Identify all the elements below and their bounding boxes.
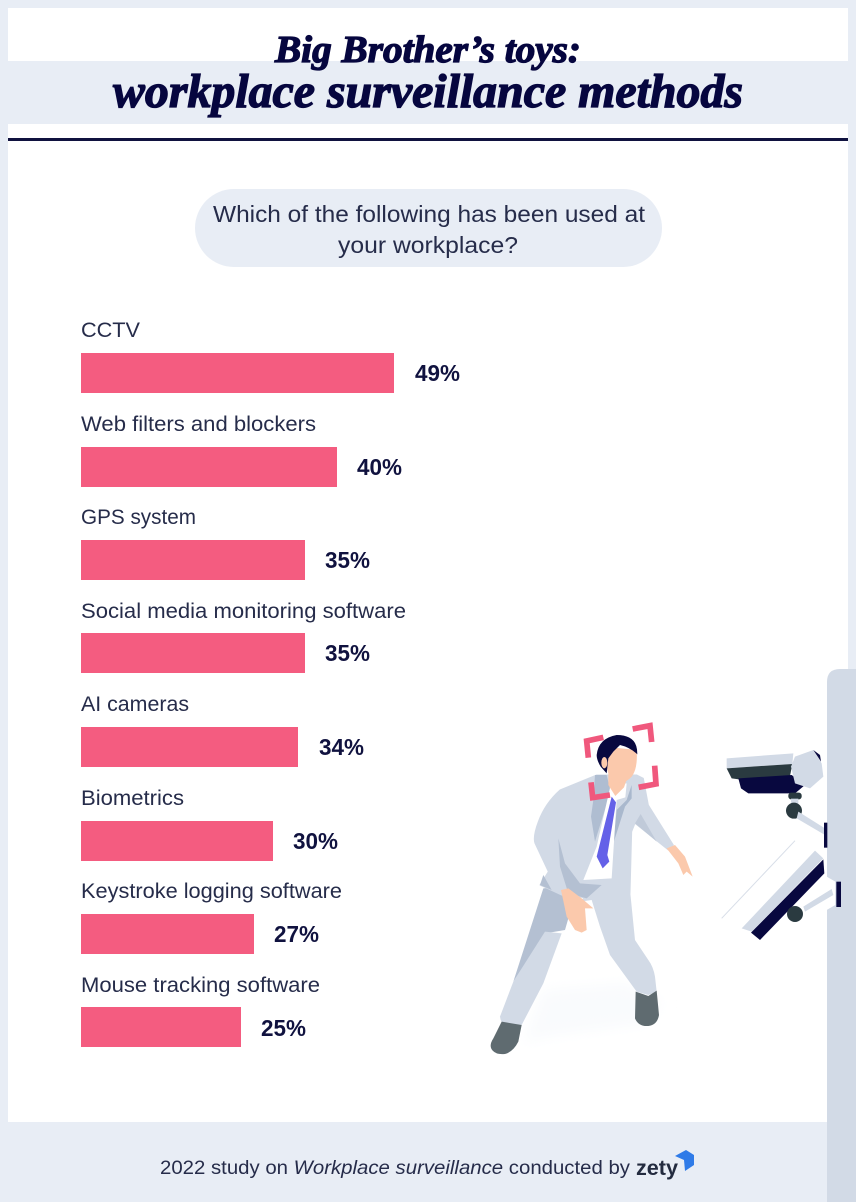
title: workplace surveillance methods (113, 65, 743, 118)
question pill: your workplace? (338, 232, 518, 258)
title band (8, 61, 848, 124)
bar: Keystroke logging software 27%: 27% (274, 921, 319, 947)
bar: Web filters and blockers 40%: Web filters and blockers (81, 413, 316, 436)
bar: CCTV 49% (81, 319, 460, 393)
bar: Keystroke logging software 27% (81, 880, 342, 954)
bar: Mouse tracking software 25%: Mouse tracking software (81, 974, 320, 997)
bar: CCTV 49%: 49% (415, 360, 460, 386)
neck (608, 770, 630, 796)
trousers (500, 887, 657, 1025)
bar: Social media monitoring software 35%: 35% (325, 640, 370, 666)
far hand (667, 845, 693, 877)
face scan brackets (587, 726, 656, 798)
bar: Social media monitoring software 35% (81, 600, 406, 673)
illustration: man under surveillance (491, 726, 693, 1054)
bar: AI cameras 34%: 34% (319, 734, 364, 760)
bar: GPS system 35%: 35% (325, 547, 370, 573)
shirt (583, 783, 627, 880)
near hand (561, 888, 593, 933)
footer source text: 2022 study on Workplace surveillance conducted by (160, 1157, 630, 1179)
bar: Mouse tracking software 25%: 25% (261, 1015, 306, 1041)
jacket (534, 775, 673, 898)
bar: Biometrics 30%: 30% (293, 828, 338, 854)
hair (597, 735, 637, 773)
bar: CCTV 49%: CCTV (81, 319, 140, 342)
bar: GPS system 35% (81, 506, 370, 580)
bar: Web filters and blockers 40%: 40% (357, 454, 402, 480)
wall (827, 669, 856, 1202)
bar: Keystroke logging software 27%: Keystroke logging software (81, 880, 342, 903)
zety logo (636, 1150, 694, 1180)
floor shadow (523, 983, 663, 1043)
zety logo: zety (636, 1157, 678, 1180)
upper camera (727, 750, 827, 848)
bar: GPS system 35%: GPS system (81, 506, 196, 529)
ear (601, 757, 607, 768)
title: Big Brother’s toys: (274, 29, 581, 71)
lower camera (722, 841, 841, 940)
title (113, 29, 743, 118)
shoes (491, 991, 659, 1054)
bar: Social media monitoring software 35%: Social media monitoring software (81, 600, 406, 623)
illustration: security cameras (722, 750, 841, 940)
question pill: Which of the following has been used at (213, 201, 645, 227)
bar: AI cameras 34% (81, 693, 364, 767)
bar chart (81, 319, 460, 1047)
bar: Web filters and blockers 40% (81, 413, 402, 487)
footer band (0, 1122, 856, 1202)
face (606, 747, 637, 783)
question pill (195, 189, 662, 267)
bar: AI cameras 34%: AI cameras (81, 693, 189, 716)
bar: Biometrics 30%: Biometrics (81, 787, 184, 810)
tie (597, 797, 616, 868)
bar: Mouse tracking software 25% (81, 974, 320, 1047)
bar: Biometrics 30% (81, 787, 338, 861)
